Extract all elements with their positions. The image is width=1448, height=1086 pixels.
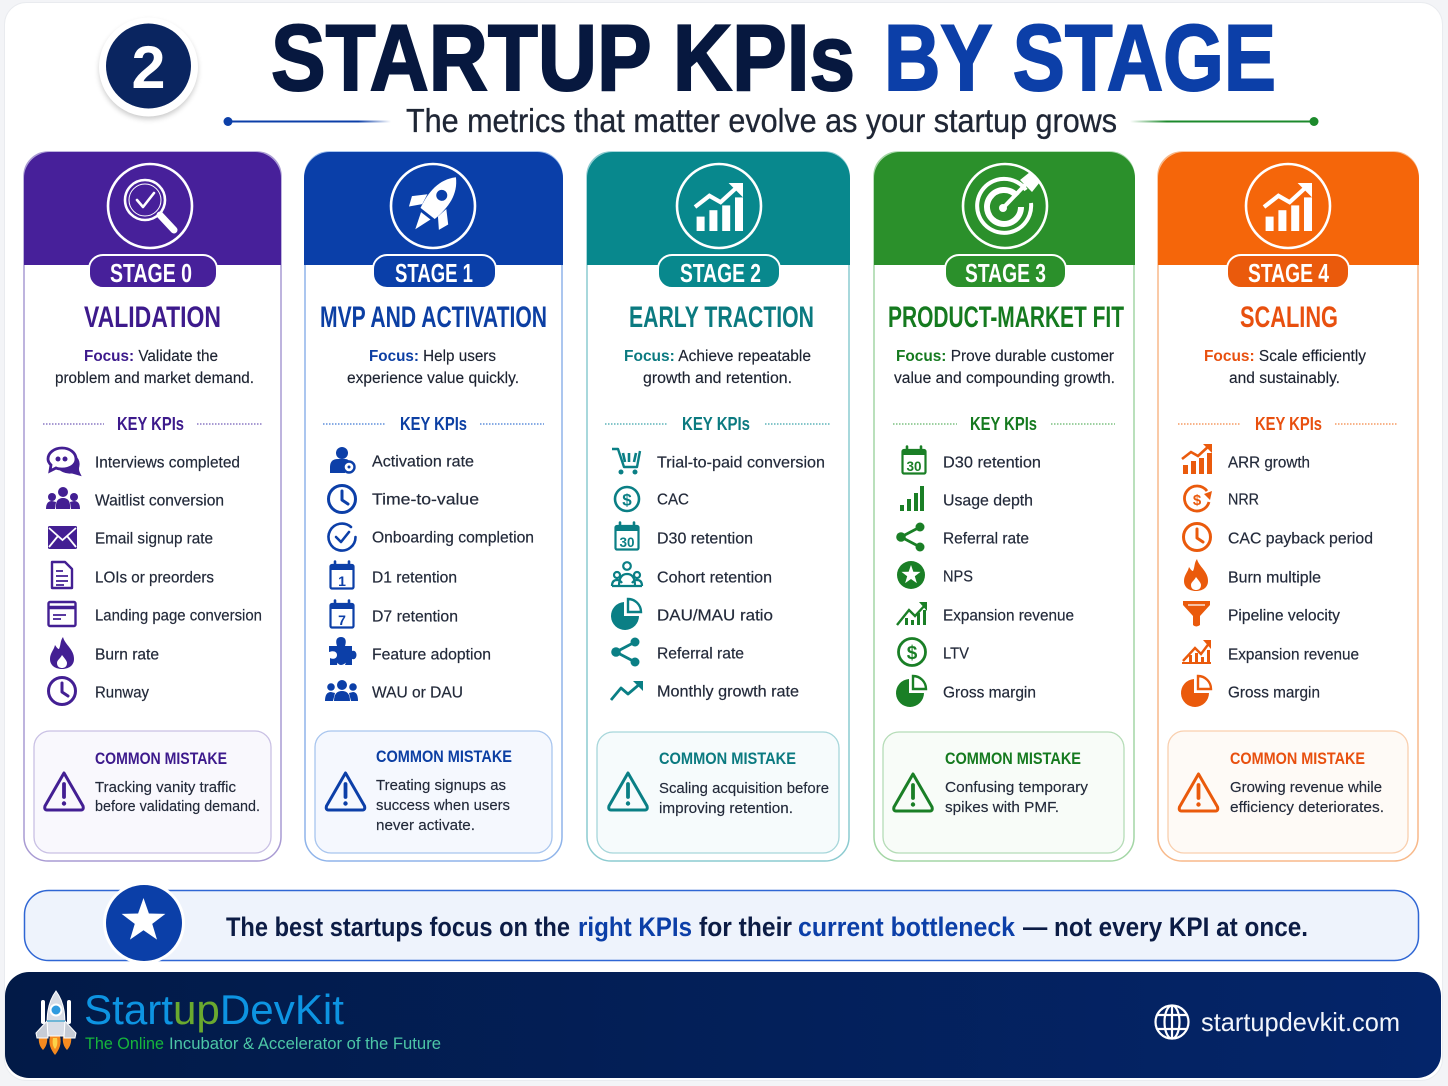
- stage 1 focus: experience value quickly.: [347, 370, 519, 387]
- panel: stage 3 product-market fit: [874, 152, 1135, 861]
- kpi: pipeline velocity: Pipeline velocity: [1228, 608, 1340, 624]
- kpi: lois or preorders: LOIs or preorders: [95, 570, 214, 586]
- takeaway text: current bottleneck: [798, 912, 1016, 942]
- kpi: time-to-value: Time-to-value: [372, 492, 479, 508]
- stage 3 pill: STAGE 3: [965, 258, 1046, 288]
- kpi: d30 retention: 30: [906, 459, 922, 474]
- stage 0 common mistake: Tracking vanity traffic: [95, 779, 236, 796]
- kpi: landing page conversion: Landing page conversion: [95, 608, 262, 624]
- stage 4 pill: STAGE 4: [1248, 258, 1329, 288]
- stage 4 key kpis heading: KEY KPIs: [1255, 414, 1322, 434]
- kpi: burn rate: Burn rate: [95, 646, 159, 664]
- kpi: burn multiple: Burn multiple: [1228, 570, 1321, 586]
- stage 4 focus: Focus: Scale efficiently: [1204, 348, 1366, 365]
- stage 4 common mistake: COMMON MISTAKE: [1230, 750, 1365, 768]
- stage 4 common mistake: Growing revenue while: [1230, 779, 1382, 796]
- stage 3 focus: [894, 348, 1115, 387]
- kpi: wau or dau: WAU or DAU: [372, 684, 463, 702]
- stage 1 focus: Focus: Help users: [369, 348, 496, 365]
- kpi: waitlist conversion: Waitlist conversion: [95, 492, 224, 510]
- kpi: referral rate: Referral rate: [943, 530, 1029, 548]
- kpi: d30 retention: D30 retention: [657, 530, 753, 548]
- stage 1 focus: [347, 348, 519, 387]
- kpi: time-to-value: [328, 486, 479, 512]
- kpi: cac: CAC: [657, 492, 689, 508]
- kpi: d1 retention: 1: [338, 573, 346, 589]
- kpi: usage depth: Usage depth: [943, 492, 1033, 510]
- kpi: runway: Runway: [95, 684, 149, 702]
- kpi: burn rate: [50, 637, 159, 669]
- stage 3 common mistake: Confusing temporary: [945, 779, 1089, 796]
- kpi: email signup rate: Email signup rate: [95, 530, 213, 548]
- stage 0 focus: [55, 348, 254, 387]
- kpi: nps: [897, 561, 973, 589]
- stage 1 key kpis heading: KEY KPIs: [400, 414, 467, 434]
- kpi: nrr: $: [1193, 492, 1202, 509]
- stage 2 focus: Focus: Achieve repeatable: [624, 348, 811, 365]
- kpi: gross margin: [896, 676, 1036, 707]
- kpi: d30 retention: 30: [619, 535, 635, 550]
- footer bar: [5, 972, 1441, 1078]
- kpi: arr growth: [1182, 444, 1310, 474]
- kpi: d1 retention: [330, 562, 457, 589]
- kpi: interviews completed: Interviews completed: [95, 454, 240, 472]
- kpi: wau or dau: [325, 680, 463, 702]
- title: [271, 5, 1276, 110]
- icon: globe: [1156, 1006, 1188, 1038]
- kpi: ltv: $: [907, 643, 918, 664]
- kpi: onboarding completion: Onboarding completion: [372, 530, 534, 546]
- kpi: expansion revenue: [897, 602, 1074, 625]
- stage 4 focus: and sustainably.: [1229, 370, 1340, 387]
- kpi: feature adoption: [329, 637, 491, 665]
- kpi: activation rate: [330, 447, 474, 473]
- kpi: email signup rate: [48, 526, 213, 549]
- kpi: dau/mau ratio: DAU/MAU ratio: [657, 608, 773, 624]
- number badge: [99, 18, 198, 119]
- stage 1 common mistake: success when users: [376, 797, 510, 814]
- kpi: feature adoption: Feature adoption: [372, 646, 491, 664]
- kpi: d30 retention: [616, 522, 753, 550]
- kpi: interviews completed: [48, 448, 240, 474]
- stage 0 header band: [24, 152, 281, 265]
- stage 3 header band: [874, 152, 1135, 265]
- kpi: d30 retention: D30 retention: [943, 454, 1041, 472]
- kpi: dau/mau ratio: [611, 599, 773, 630]
- stage 0 focus: Focus: Validate the: [84, 348, 218, 365]
- stage 4 common mistake: efficiency deteriorates.: [1230, 799, 1384, 816]
- kpi: d30 retention: [902, 446, 1041, 474]
- kpi: cac payback period: [1184, 524, 1373, 550]
- stage 1 pill: STAGE 1: [395, 258, 473, 288]
- stage 1 heading: MVP AND ACTIVATION: [320, 301, 547, 334]
- stage 0 focus: problem and market demand.: [55, 370, 254, 387]
- takeaway text: right KPIs: [578, 912, 692, 942]
- website: startupdevkit.com: [1201, 1007, 1400, 1037]
- stage 3 key kpis heading: KEY KPIs: [970, 414, 1037, 434]
- kpi: expansion revenue: Expansion revenue: [943, 608, 1074, 624]
- kpi: trial-to-paid conversion: Trial-to-paid conversion: [657, 454, 825, 472]
- kpi: expansion revenue: Expansion revenue: [1228, 646, 1359, 664]
- stage 4 header band: [1158, 152, 1419, 265]
- kpi: d7 retention: 7: [338, 612, 346, 628]
- stage 2 pill: [658, 255, 780, 288]
- kpi: nps: NPS: [943, 568, 973, 586]
- icon: logo rocket: [36, 991, 76, 1055]
- kpi: onboarding completion: [329, 524, 534, 551]
- icon: target with dart: [963, 164, 1047, 248]
- stage 0 common mistake: COMMON MISTAKE: [95, 750, 227, 768]
- kpi: cohort retention: [612, 562, 772, 586]
- stage 2 header band: [587, 152, 850, 265]
- panel: stage 2 early traction: [587, 152, 850, 861]
- stage 3 focus: Focus: Prove durable customer: [896, 348, 1114, 365]
- logo tagline: The Online: [85, 1034, 164, 1053]
- logo wordmark: StartupDevKit: [84, 986, 344, 1033]
- stage 4 focus: [1204, 348, 1366, 387]
- stage 3 common mistake: COMMON MISTAKE: [945, 750, 1081, 768]
- stage 2 focus: growth and retention.: [643, 370, 792, 387]
- stage 1 common mistake: [315, 731, 552, 853]
- stage 2 pill: STAGE 2: [680, 258, 761, 288]
- kpi: trial-to-paid conversion: [612, 449, 825, 474]
- kpi: nrr: NRR: [1228, 492, 1259, 508]
- takeaway text: for their: [699, 912, 792, 942]
- stage 3 common mistake: spikes with PMF.: [945, 799, 1059, 816]
- stage 2 key kpis heading: KEY KPIs: [682, 414, 750, 434]
- stage 1 common mistake: Treating signups as: [376, 777, 506, 794]
- kpi: d1 retention: D1 retention: [372, 570, 457, 586]
- kpi: referral rate: Referral rate: [657, 646, 744, 662]
- title: BY STAGE: [884, 5, 1276, 110]
- stage 2 common mistake: Scaling acquisition before: [659, 780, 829, 797]
- kpi: usage depth: [900, 486, 1033, 511]
- title: STARTUP KPIs: [271, 5, 855, 110]
- icon: growth chart: [1246, 164, 1330, 248]
- stage 0 key kpis heading: KEY KPIs: [117, 414, 184, 434]
- panel: stage 4 scaling: [1158, 152, 1419, 861]
- stage 0 heading: VALIDATION: [84, 301, 221, 334]
- stage 3 focus: value and compounding growth.: [894, 370, 1115, 387]
- stage 2 focus: [624, 348, 811, 387]
- kpi: nrr: [1185, 486, 1259, 511]
- takeaway text: [226, 912, 1308, 942]
- kpi: cac: [615, 487, 689, 511]
- kpi: gross margin: Gross margin: [943, 684, 1036, 702]
- kpi: monthly growth rate: Monthly growth rate: [657, 684, 799, 700]
- kpi: cac: $: [622, 490, 632, 510]
- kpi: activation rate: Activation rate: [372, 454, 474, 470]
- stage 0 common mistake: before validating demand.: [95, 798, 260, 815]
- stage 1 common mistake: COMMON MISTAKE: [376, 748, 512, 766]
- kpi: ltv: [898, 638, 969, 666]
- kpi: d7 retention: [330, 600, 458, 628]
- stage 3 common mistake: [883, 732, 1124, 853]
- kpi: arr growth: ARR growth: [1228, 454, 1310, 472]
- kpi: expansion revenue: [1182, 640, 1359, 664]
- kpi: ltv: LTV: [943, 646, 969, 662]
- icon: star badge: [103, 882, 185, 964]
- takeaway banner: [24, 882, 1418, 964]
- logo tagline: Incubator & Accelerator of the Future: [169, 1034, 441, 1053]
- takeaway text: — not every KPI at once.: [1023, 912, 1308, 942]
- kpi: gross margin: [1181, 676, 1320, 707]
- stage 4 common mistake: [1168, 731, 1408, 853]
- stage 0 pill: STAGE 0: [110, 258, 192, 288]
- icon: growth chart: [677, 164, 761, 248]
- takeaway text: The best startups focus on the: [226, 912, 570, 942]
- icon: magnifier with check: [108, 164, 192, 248]
- number badge: 2: [132, 34, 166, 101]
- stage 3 heading: PRODUCT-MARKET FIT: [888, 301, 1124, 334]
- kpi: referral rate: [896, 522, 1029, 552]
- kpi: gross margin: Gross margin: [1228, 684, 1320, 702]
- kpi: d7 retention: D7 retention: [372, 608, 458, 626]
- kpi: lois or preorders: [52, 562, 214, 588]
- kpi: waitlist conversion: [46, 487, 224, 510]
- stage 2 common mistake: COMMON MISTAKE: [659, 750, 796, 768]
- kpi: landing page conversion: [48, 602, 262, 626]
- stage 2 common mistake: [597, 732, 839, 853]
- panel: stage 0 validation: [24, 152, 281, 861]
- subtitle: The metrics that matter evolve as your startup grows: [406, 102, 1117, 139]
- kpi: cohort retention: Cohort retention: [657, 570, 772, 586]
- kpi: monthly growth rate: [611, 681, 799, 700]
- kpi: runway: [48, 678, 149, 704]
- stage 0 common mistake: [34, 731, 271, 853]
- kpi: referral rate: [611, 638, 744, 666]
- kpi: cac payback period: CAC payback period: [1228, 530, 1373, 548]
- kpi: burn multiple: [1184, 559, 1321, 591]
- panel: stage 1 mvp and activation: [304, 152, 563, 861]
- stage 2 common mistake: improving retention.: [659, 800, 793, 817]
- stage 4 heading: SCALING: [1240, 301, 1338, 334]
- icon: rocket: [391, 163, 475, 248]
- stage 1 common mistake: never activate.: [376, 817, 475, 834]
- stage 1 header band: [304, 152, 563, 265]
- stage 2 heading: EARLY TRACTION: [629, 301, 814, 334]
- kpi: pipeline velocity: [1183, 601, 1340, 626]
